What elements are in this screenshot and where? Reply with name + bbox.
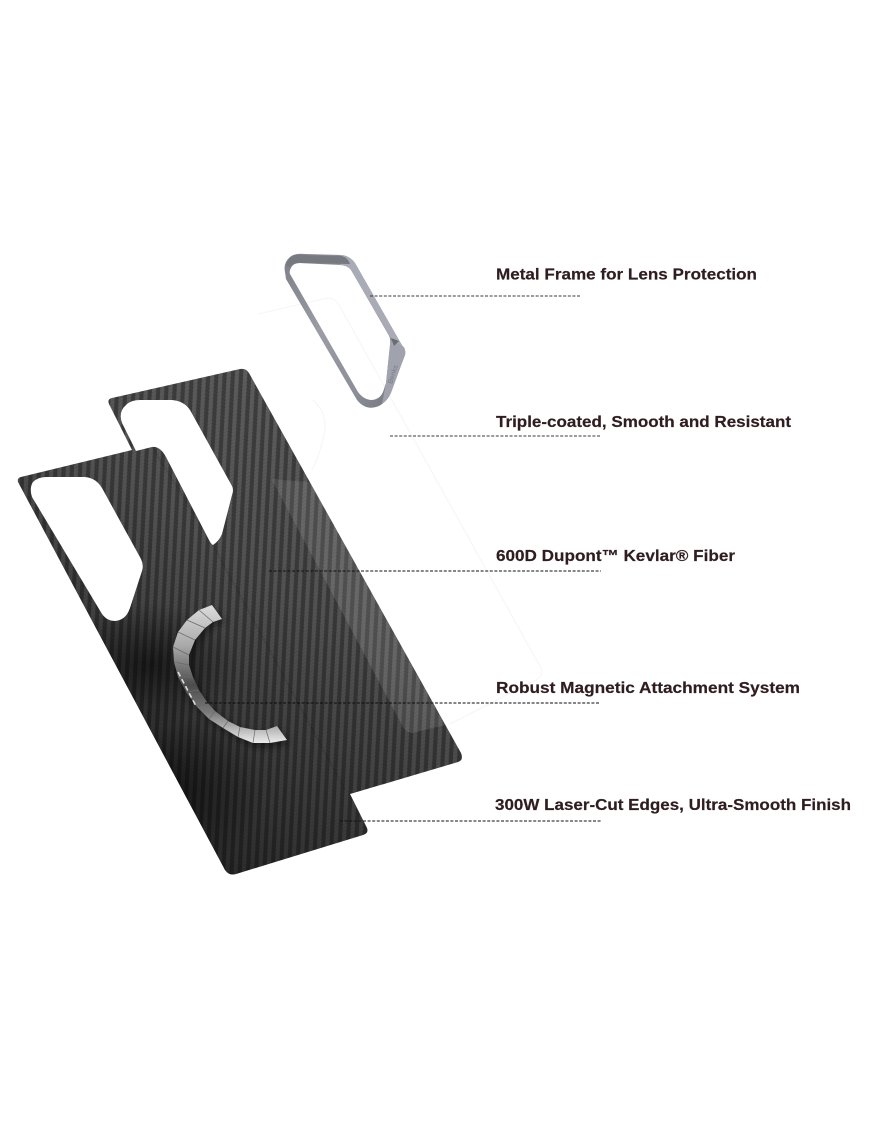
metal lens frame xyxy=(285,254,405,408)
label: magnet: Robust Magnetic Attachment System xyxy=(496,680,800,697)
label: edges: 300W Laser-Cut Edges, Ultra-Smooth Finish xyxy=(495,797,851,814)
engraved logo on frame: Benks xyxy=(387,364,400,385)
label: metal frame: Metal Frame for Lens Protection xyxy=(496,266,757,284)
leader line: kevlar xyxy=(269,570,601,572)
leader line: metal frame xyxy=(370,295,581,297)
front sheet seam xyxy=(152,447,345,790)
carbon fiber sheets xyxy=(0,360,480,880)
translucent coating band xyxy=(272,479,445,733)
label: coating: Triple-coated, Smooth and Resistant xyxy=(496,414,792,431)
label: kevlar: 600D Dupont™ Kevlar® Fiber xyxy=(496,548,735,565)
leader line: coating xyxy=(390,435,600,437)
leader line: magnet xyxy=(205,702,599,704)
clear coating layer outline xyxy=(258,298,541,724)
leader line: edges xyxy=(340,820,601,822)
magnetic ring xyxy=(173,605,290,747)
